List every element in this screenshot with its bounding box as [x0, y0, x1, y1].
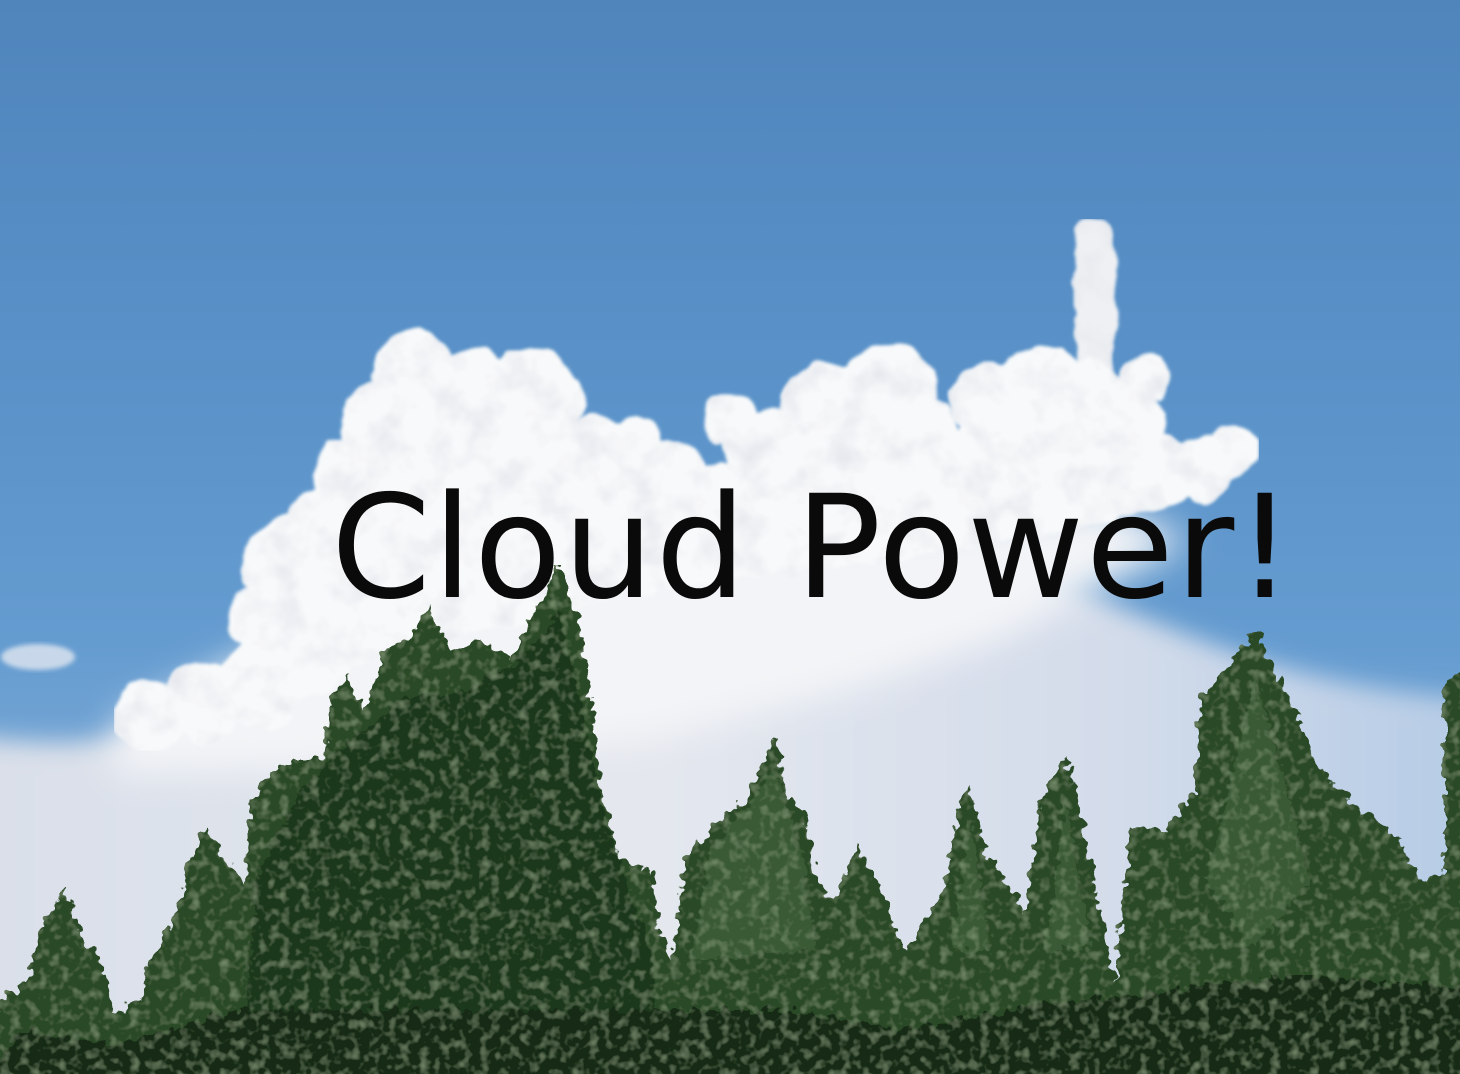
dark understory — [0, 975, 1460, 1074]
soft cloud base — [110, 500, 1190, 775]
tree line, back layer — [0, 565, 1460, 1074]
title: Cloud Power! — [331, 464, 1295, 631]
low haze bank — [0, 570, 1460, 1074]
central tree mass — [240, 610, 655, 1074]
small distant cloud — [1, 644, 75, 670]
forest silhouette — [0, 565, 1460, 1074]
lighter mid-ground conifers — [690, 680, 1310, 960]
sparse tree highlights — [690, 680, 1310, 960]
lower tree shadows — [0, 975, 1460, 1074]
cloud finger column — [1075, 219, 1115, 394]
dark central conifer — [240, 610, 655, 1074]
cumulus cloud — [114, 219, 1259, 751]
